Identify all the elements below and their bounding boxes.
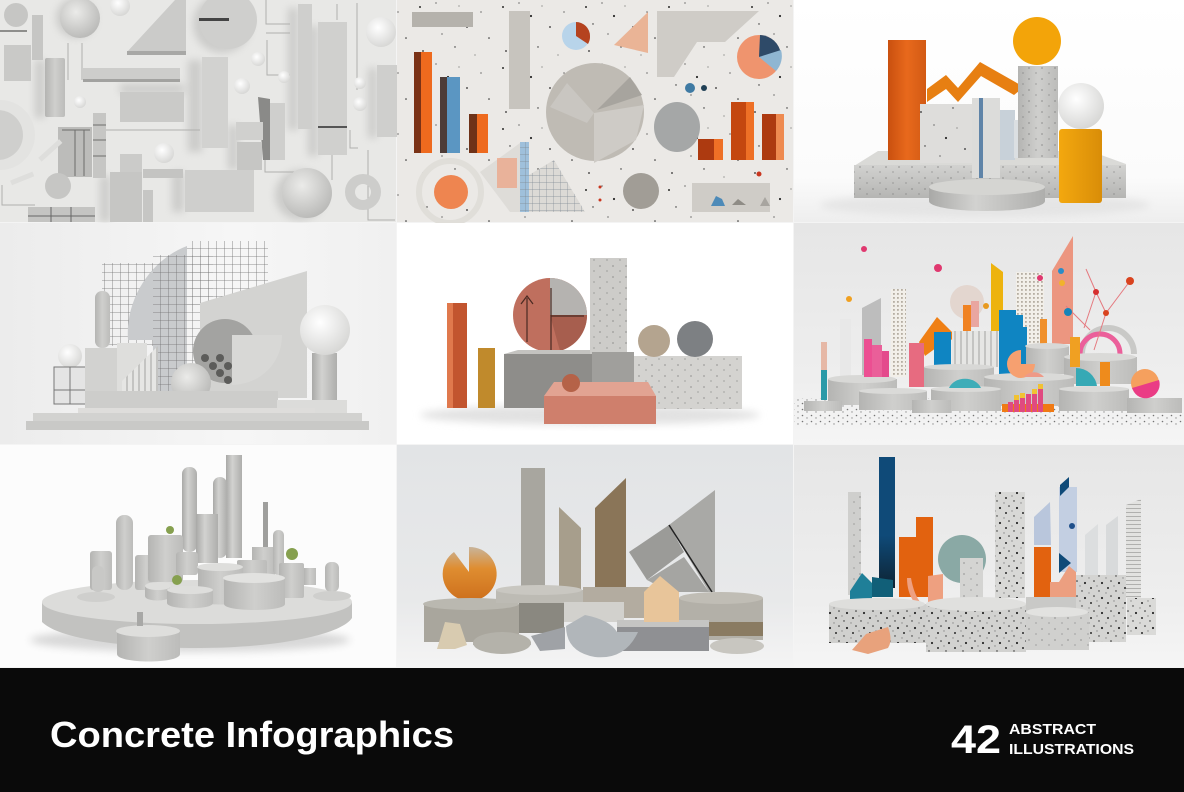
pink block	[544, 374, 656, 424]
teal half disc	[949, 379, 981, 388]
pie right	[737, 35, 782, 79]
orange cylinder	[888, 40, 926, 160]
title: Concrete Infographics	[50, 714, 454, 755]
cylinder	[521, 468, 545, 590]
orange pie	[443, 547, 497, 601]
footer bar	[0, 668, 1184, 792]
concrete wedge	[657, 11, 759, 77]
pedestals front	[804, 386, 1182, 413]
panel: middle-centre terracotta	[397, 223, 793, 444]
grid triangle	[480, 142, 585, 212]
illustration count: 42	[951, 718, 1001, 762]
dotted disc	[193, 319, 257, 384]
right disc	[1131, 369, 1160, 398]
panel: bottom-centre stone shapes	[397, 445, 793, 667]
sphere on yellow cylinder	[1058, 83, 1104, 203]
grey tangram	[629, 490, 715, 592]
front stones	[437, 615, 764, 657]
bases	[423, 585, 763, 651]
round pedestals	[77, 563, 351, 662]
slanted wall	[200, 271, 307, 398]
count caption	[1009, 721, 1134, 758]
coral pie pieces	[821, 337, 1110, 400]
tall bars	[447, 303, 495, 408]
pie small	[562, 22, 590, 50]
plinth	[854, 151, 1126, 198]
count caption: ILLUSTRATIONS	[1009, 741, 1134, 758]
round base	[42, 580, 352, 648]
speckled tower	[590, 258, 627, 363]
terrazzo pedestals	[829, 575, 1156, 652]
teal circle	[938, 535, 986, 598]
round base	[929, 179, 1045, 211]
green trees	[166, 526, 298, 585]
panel: middle-right colourful city	[794, 223, 1184, 444]
bar chart left	[414, 52, 488, 153]
teal and peach shapes	[850, 566, 1076, 603]
red dots	[598, 172, 762, 202]
panel: middle-left grey grid composition	[0, 223, 396, 444]
peach fragment	[852, 627, 890, 654]
concrete blocks	[920, 66, 1058, 178]
pink bars	[864, 339, 924, 387]
triangle block	[127, 0, 186, 55]
circle with slot	[199, 0, 257, 49]
pedestals back	[828, 343, 1137, 406]
left blocks	[54, 343, 158, 404]
network lines	[1066, 269, 1130, 350]
spheres	[60, 0, 396, 218]
tall columns	[848, 457, 1141, 598]
orange roof	[919, 317, 957, 356]
peach triangle	[614, 12, 648, 53]
orange disc with ring	[419, 161, 481, 223]
house	[644, 576, 679, 622]
concrete pie	[546, 63, 644, 163]
zigzag arrow	[927, 62, 1024, 102]
bar chart right	[698, 102, 784, 160]
steps	[26, 391, 369, 430]
panel: top-right orange chart on plinth	[794, 0, 1184, 222]
base blocks	[504, 350, 742, 409]
orange bars	[899, 517, 1051, 597]
small balls	[685, 83, 707, 93]
towers	[840, 236, 1073, 377]
torus	[350, 179, 376, 205]
yellow ball	[1013, 17, 1061, 65]
panel: top-left grey relief	[0, 0, 397, 222]
terracotta pie	[513, 278, 587, 352]
count caption: ABSTRACT	[1009, 721, 1096, 738]
small bar chart	[1002, 384, 1054, 412]
rainbow arc	[1080, 328, 1134, 354]
panel: bottom-right speckled terrazzo	[794, 445, 1184, 667]
sliced columns	[559, 478, 626, 590]
sphere lamp	[300, 305, 350, 403]
small chart strip	[692, 183, 770, 212]
floating balls	[846, 246, 1134, 316]
towers	[90, 455, 339, 598]
balls	[638, 321, 713, 357]
grid tower	[102, 241, 268, 391]
panel: top-centre speckled charts	[397, 0, 793, 223]
blue bars	[934, 310, 1027, 376]
panel: bottom-left concrete city	[0, 445, 396, 667]
ring	[0, 100, 35, 170]
ribbed block	[952, 331, 998, 367]
gravel	[794, 398, 1184, 426]
rock	[654, 102, 700, 152]
